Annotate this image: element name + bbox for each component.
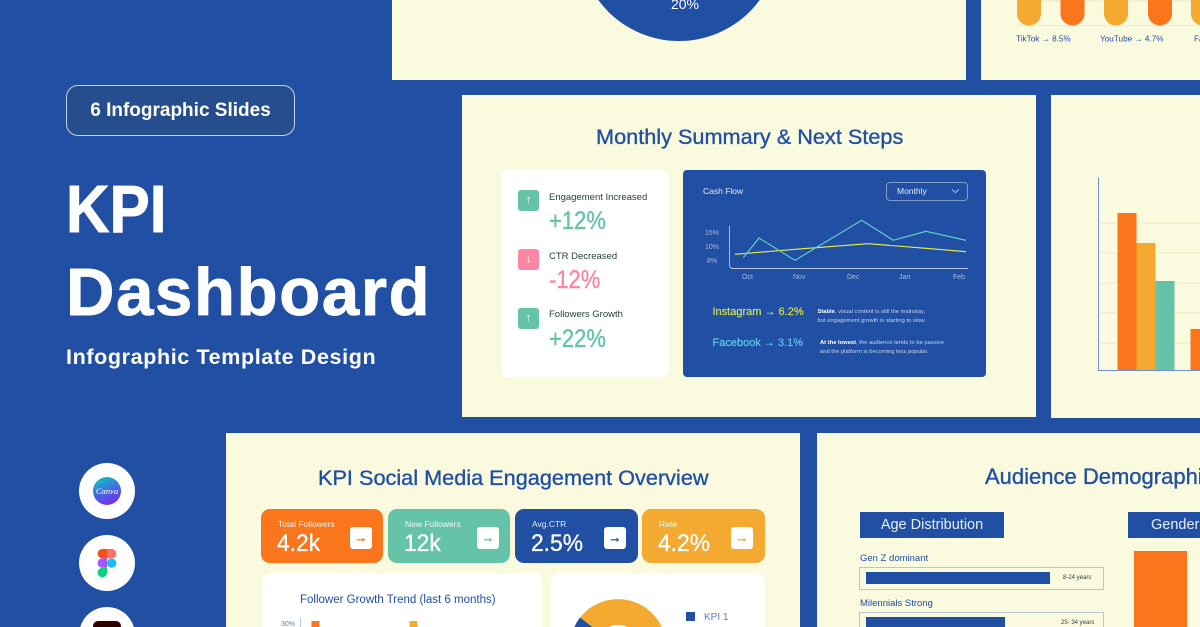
panel: top platform pills slide — [981, 0, 1200, 80]
line chart: Dec — [847, 274, 860, 281]
card: new followers: 12k — [404, 530, 441, 557]
bar: 18-24 years — [859, 567, 1104, 590]
label: gender: Gender — [1151, 517, 1199, 533]
card: total followers: 4.2k — [277, 530, 320, 557]
label: age distribution: Age Distribution — [881, 517, 983, 533]
bar: gender share — [1134, 551, 1187, 627]
stat: Facebook: Facebook → 3.1% — [712, 337, 803, 349]
line chart: 15% — [705, 230, 719, 237]
icon: CTR down — [518, 249, 539, 270]
card: new followers: → — [482, 530, 494, 545]
card: average CTR: → — [608, 530, 622, 545]
card: rate — [642, 509, 765, 563]
note: Instagram: but engagement growth is starting to slow. — [818, 318, 926, 324]
dropdown: monthly — [886, 182, 968, 200]
pill bar chart — [1016, 0, 1200, 44]
panel: KPI share donut — [551, 573, 765, 627]
title: Dashboard — [66, 255, 431, 330]
icon: engagement up: ↑ — [526, 194, 531, 206]
label: age distribution — [860, 512, 1004, 538]
heading: monthly summary: Monthly Summary & Next Steps — [596, 124, 903, 149]
panel: KPI engagement overview slide — [226, 433, 800, 627]
line chart: 10% — [705, 244, 719, 251]
icon: Canva — [79, 463, 135, 519]
icon: Figma — [79, 535, 135, 591]
panel: cash flow — [683, 170, 986, 377]
icon: followers up: ↑ — [526, 312, 531, 324]
icon: design app — [80, 607, 134, 627]
value: +22%: +22% — [549, 325, 606, 353]
title — [66, 172, 431, 330]
panel: top pie slide — [392, 0, 966, 80]
legend: KPI 1: KPI 1 — [704, 612, 728, 623]
card: total followers — [261, 509, 383, 563]
icon: engagement up — [518, 190, 539, 211]
panel: cash flow: Cash Flow — [703, 186, 744, 196]
panel: bar chart slide — [1051, 95, 1200, 418]
bar: 25-34 years: 25- 34 years — [1061, 620, 1094, 626]
panel: follower growth trend — [262, 573, 542, 627]
note: Facebook: and the platform is becoming less popular. — [820, 349, 929, 355]
donut chart — [574, 599, 662, 627]
line chart — [705, 220, 968, 281]
bar chart: follower growth — [281, 618, 418, 627]
value: -12%: -12% — [549, 266, 600, 294]
card: average CTR — [515, 509, 638, 563]
chart title: follower growth trend: Follower Growth Trend (last 6 months) — [300, 594, 496, 606]
label: followers growth: Followers Growth — [549, 309, 623, 320]
card: new followers: New Followers — [405, 519, 461, 529]
line chart: Feb — [953, 274, 965, 281]
label: engagement increased: Engagement Increased — [549, 192, 647, 203]
card: total followers: Total Followers — [278, 519, 335, 529]
stat: Instagram: Instagram → 6.2% — [712, 306, 804, 318]
line chart: Oct — [742, 274, 753, 281]
card: rate: Rate — [659, 519, 677, 529]
badge: slide count: 6 Infographic Slides — [90, 100, 271, 121]
note: Facebook: , the audience tends to be passive — [856, 340, 944, 346]
label: Millennials strong: Milennials Strong — [860, 598, 933, 609]
label: Gen Z dominant: Gen Z dominant — [860, 553, 928, 564]
line chart: Jan — [899, 274, 910, 281]
dropdown: monthly: Monthly — [897, 186, 928, 196]
pill bar chart: TikTok → 8.5% — [1016, 34, 1071, 44]
panel: audience demographics slide — [817, 433, 1200, 627]
heading: engagement overview: KPI Social Media Engagement Overview — [318, 465, 709, 490]
panel: KPI change list — [501, 170, 669, 377]
pie chart slice — [598, 0, 760, 41]
note: Instagram: Stable — [818, 309, 836, 315]
icon: CTR down: ↓ — [526, 253, 531, 265]
label: CTR decreased: CTR Decreased — [549, 251, 617, 262]
note: Facebook: At the lowest — [820, 340, 856, 346]
card: average CTR: Avg.CTR — [532, 519, 566, 529]
card: average CTR: 2.5% — [531, 530, 583, 557]
title: KPI — [66, 172, 167, 247]
bar: 25-34 years — [859, 612, 1104, 627]
pill bar chart: YouTube → 4.7% — [1100, 34, 1164, 44]
line chart: 8% — [707, 258, 717, 265]
badge: slide count — [66, 85, 295, 136]
icon: followers up — [518, 308, 539, 329]
label: gender — [1128, 512, 1200, 538]
bar: 18-24 years: 8-24 years — [1063, 575, 1091, 581]
value: +12%: +12% — [549, 207, 606, 235]
bar chart — [1098, 178, 1200, 371]
panel: monthly summary slide — [462, 95, 1036, 417]
icon: Canva: Canva — [96, 486, 118, 496]
line chart: Nov — [793, 274, 806, 281]
subtitle: Infographic Template Design — [66, 345, 376, 369]
card: rate: → — [736, 530, 748, 545]
card: total followers: → — [354, 530, 368, 545]
note: Instagram: , visual content is still the mainstay, — [835, 309, 925, 315]
legend: KPI 1 — [686, 612, 728, 623]
card: rate: 4.2% — [658, 530, 710, 557]
card: new followers — [388, 509, 510, 563]
